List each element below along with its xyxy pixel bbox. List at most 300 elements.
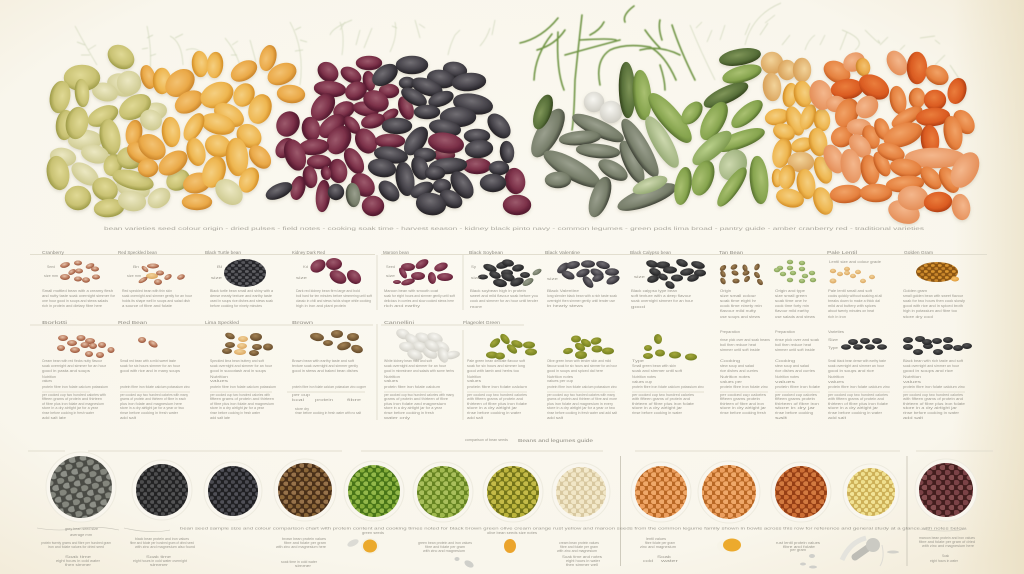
row 1 bean specimens: maroon beans, column 4	[308, 257, 364, 287]
row 2 description text, columns 5-8: Type	[632, 359, 644, 363]
row 1 small side labels: size	[634, 275, 645, 279]
row 1 column headings: Kidney Dark Red	[292, 250, 325, 255]
bottom bowl 5: green beans	[344, 461, 404, 521]
row 2 description text, columns 5-8: thirteen of fibre plus iron folate	[467, 402, 527, 406]
row 1 bean specimens: black cluster, column 3	[224, 259, 266, 287]
row 2 description text, columns 1-4: store in a dry airtight jar for a year	[42, 406, 99, 410]
bottom captions: bowls 9-13: eight hours in water	[930, 559, 959, 563]
bottom captions: bowls 1-4: black bean protein and iron values	[135, 537, 189, 541]
row 1 description text: overnight then simmer gently until tender use	[547, 299, 615, 303]
row 2 description text, columns 9-12: soak overnight and simmer an hour	[828, 364, 885, 368]
bottom captions: bowls 5-8: green bean protein and iron values	[418, 541, 472, 545]
row 2 description text, columns 1-4: good in pasta and soups	[42, 369, 90, 373]
row 2 description text, columns 9-12: Preparation	[775, 330, 795, 334]
row 2 description text, columns 9-12: rinse before cooking fresh	[720, 411, 766, 415]
row 1 column headings: Black Turtle bean	[205, 250, 241, 255]
row 1 small side labels: Bn	[133, 265, 139, 269]
row 2 column headings: Red Bean	[118, 320, 148, 325]
row 1 description text: long slender black bean with a rich taste soak	[547, 294, 617, 298]
row 2 description text, columns 5-8: values	[384, 379, 398, 383]
row 2 description text, columns 1-4: grams of protein and thirteen of fibre in each	[120, 397, 186, 401]
row 1 column headings: Tan Bean	[719, 250, 744, 255]
row 2 bean specimens: olive beans, column 8	[643, 333, 697, 360]
row 1 description text: cooks quickly without soaking at all	[828, 294, 882, 298]
row 2 description text, columns 1-4: Small red bean with a mild sweet taste	[120, 359, 176, 363]
row 2 description text, columns 9-12: Type	[828, 346, 838, 350]
row 1 column headings	[42, 250, 933, 255]
row 2 description text, columns 1-4: per cooked cup two hundred calories with	[42, 393, 106, 397]
row 1 description text: Black Valentine	[547, 289, 579, 293]
row 2 description text, columns 5-8: with fifteen grams of protein and	[632, 397, 690, 401]
bottom bowl 3: black beans	[204, 462, 262, 520]
row 2 description text, columns 1-4: rinse before cooking in fresh water	[210, 411, 261, 415]
row 2 description text, columns 1-4: rinse before cooking in fresh water	[120, 411, 179, 415]
bottom bowl 6: green beans	[413, 462, 473, 522]
bottom captions: bowls 9-13: fibre folate per gram	[645, 541, 675, 545]
top bean display: orange and red beans	[808, 49, 984, 227]
bottom section heading	[465, 438, 594, 443]
decorative sprigs above beans	[75, 3, 960, 85]
row 2 description text, columns 5-8: store in a dry airtight jar	[632, 406, 683, 410]
row 2 description text, columns 1-4: protein fibre iron folate calcium potassium zinc copper	[292, 385, 367, 389]
row 2 description text, columns 5-8: Small green bean with skin	[632, 364, 676, 368]
row 2 description text, columns 9-12: per cooked cup two hundred calories	[903, 393, 963, 397]
row 1 description text: high in iron and plant protein	[296, 304, 346, 308]
row 2 description text, columns 1-4: protein	[315, 398, 333, 402]
icon: egg yolk	[346, 538, 379, 554]
row 1 description text: use salads and stews	[775, 315, 815, 319]
bottom captions: bowls 5-8: eight hours in water	[566, 559, 601, 563]
row 2 description text, columns 5-8: good with lamb and herbs too	[467, 369, 519, 373]
row 2 description text, columns 9-12: values per	[720, 380, 743, 384]
row 2 description text, columns 1-4: soak for six hours simmer for an hour	[120, 364, 181, 368]
row 2 description text, columns 1-4: texture soak overnight and simmer gently	[292, 364, 358, 368]
row 1 description text: Origin and type	[775, 289, 805, 293]
row 2 description text, columns 9-12: Preparation	[720, 330, 740, 334]
row 1 small side labels: Kd	[303, 265, 308, 269]
row 2 description text, columns 5-8: soak overnight and simmer for an hour	[384, 364, 447, 368]
top bean display: grey-green pods	[526, 93, 678, 219]
icon: egg yolk	[504, 539, 516, 553]
row 2 description text, columns 1-4: values	[210, 379, 228, 383]
row 1 description text: soak time eight hr	[720, 299, 757, 303]
row 1 bean specimens: black beans, column 7	[555, 260, 621, 290]
bottom captions: bowls 5-8: with zinc and magnesium	[423, 549, 465, 553]
row 2 description text, columns 9-12: protein fibre iron folate calcium zinc	[903, 385, 965, 389]
row 1 small side labels: size	[471, 276, 480, 280]
row 2 description text, columns 9-12: thirteen of fibre iron	[775, 402, 819, 406]
row 2 description text, columns 9-12: rice dishes and curries	[720, 369, 758, 373]
row 1 bean specimens: pink beans, column 1	[59, 260, 100, 283]
row 2 description text, columns 5-8: flavour soak for six hours and simmer for an hour	[547, 364, 618, 368]
row 2 description text, columns 5-8: protein fibre iron folate calcium	[467, 385, 527, 389]
row 2 description text, columns 9-12: store in a dry airtight jar	[828, 406, 879, 410]
row 2 description text, columns 1-4: protein fibre iron folate calcium potassium	[42, 385, 108, 389]
row 1 description text: more	[470, 305, 482, 309]
bottom captions: bowls 5-8: then simmer well	[566, 563, 598, 567]
row 1 description text: Pale lentil small and soft	[828, 289, 872, 293]
row 2 description text, columns 1-4: good with rice and in many soups	[120, 369, 180, 373]
row 2 description text, columns 1-4: fifteen grams of protein and thirteen	[210, 397, 274, 401]
row 2 description text, columns 9-12: Nutrition notes	[775, 375, 799, 379]
row 1 description text: use soups and stews	[720, 315, 760, 319]
bottom bowl 9: orange lentils	[631, 462, 691, 522]
row 2 description text, columns 5-8: good in soups and spiced dal here	[547, 369, 603, 373]
row 2 bean specimens: white beans, column 5	[395, 327, 461, 364]
row 1 description text: soak time one hr	[775, 299, 808, 303]
bottom captions: bowls 1-4: eight hours in cold water overnight	[133, 559, 187, 563]
row 2 description text, columns 5-8: values cup	[632, 380, 652, 384]
row 2 description text, columns 9-12: rinse pick over and soak beans	[720, 338, 770, 342]
row 2 description text, columns 9-12: rinse pick over and soak	[775, 338, 819, 342]
top bean display: orange beans	[125, 45, 305, 209]
row 2 description text, columns 5-8: thirteen of fibre plus iron folate	[632, 402, 694, 406]
row 2 description text, columns 9-12: add salt	[903, 416, 923, 420]
row 1 description text: good with rice and in spiced broth	[903, 304, 963, 308]
bottom bowl 1: grey beans	[46, 452, 116, 522]
row 2 description text, columns 1-4: Nutrition	[42, 375, 56, 379]
bottom captions: bowls 1-4	[41, 527, 326, 568]
row 1 description text: flavour mild nutty	[720, 309, 756, 313]
row 2 description text, columns 1-4: add salt	[120, 416, 136, 420]
row 2 description text, columns 5-8: Pale green bean delicate flavour soft	[467, 359, 525, 363]
bottom captions: bowls 1-4: fibre and folate per gram	[284, 541, 326, 545]
row 1 column headings: Maroon bean	[383, 250, 409, 255]
row 2 description text, columns 5-8: rinse before cooking in water	[467, 411, 522, 415]
top bean display: yellow-green beans	[45, 41, 192, 217]
row 2 description text, columns 9-12: with fifteen grams of protein and	[828, 397, 884, 401]
bottom captions: bowls 1-4: brown bean protein values	[282, 537, 326, 541]
row 2 description text, columns 1-4: good in stews and baked bean dishes	[292, 369, 358, 373]
bottom captions: bowls 9-13: lentil values	[646, 537, 666, 541]
row 2 description text, columns 5-8	[384, 359, 704, 420]
row 2 description text, columns 1-4: rinse before cooking in fresh water	[42, 411, 95, 415]
row 1 small side labels: size	[296, 276, 307, 280]
row 2 description text, columns 5-8: soak and simmer until soft	[632, 369, 682, 373]
row 2 description text, columns 9-12: per cooked cup calories	[720, 393, 766, 397]
row 1 bean specimens: pink beans, column 2	[138, 264, 186, 285]
row 2 bean specimens: pink beans, column 1	[57, 335, 114, 358]
row 2 description text, columns 5-8: rinse before cooking in water	[632, 411, 683, 415]
row 2 description text, columns 1-4: protein fibre iron folate calcium potassium zinc	[120, 385, 190, 389]
bottom bowl 7: olive beans	[483, 462, 543, 522]
row 2 description text, columns 5-8: good in minestrone and salads with some herbs	[384, 369, 454, 373]
row 2 description text, columns 9-12: soak overnight and simmer an hour	[903, 364, 960, 368]
bottom captions: bowls 9-13: maroon bean protein and iron values	[919, 536, 975, 540]
bottom long caption strip: bean seed sample size and colour comparison chart with protein content and cooking times noted for black brown green olive cream orange rust yellow and maroon seeds from the common legume family shown in bowls across this row for reference and general study at a glance with notes below	[180, 526, 967, 530]
row 1 description text: and nutty taste soak overnight simmer for	[42, 294, 116, 298]
row 2 column headings: Brown	[292, 320, 314, 325]
row 1 description text: Red speckled bean with thin skin	[122, 289, 172, 293]
row 2 description text, columns 1-4: Speckled lima bean buttery and soft	[210, 359, 264, 363]
row 2 description text, columns 1-4: soak overnight and simmer for an hour	[42, 364, 107, 368]
row 1 small side labels: size mm	[127, 274, 141, 278]
row 1 description text: one hour good in soups and stews salads	[42, 299, 108, 303]
row 2 description text, columns 1-4: store in a dry airtight jar for a year or two	[120, 406, 184, 410]
row 2 description text, columns 5-8: White kidney bean mild and soft	[384, 359, 432, 363]
row 2 description text, columns 9-12: stew soup and salad	[775, 364, 809, 368]
row 1 description text: small golden bean with sweet flavour	[903, 294, 964, 298]
top bean display: green pods	[619, 47, 769, 208]
row 2 description text, columns 9-12: Nutrition notes	[720, 375, 750, 379]
row 1 description text: mild and buttery with spices	[828, 304, 876, 308]
bottom section heading: Beans and legumes guide	[518, 438, 594, 443]
row 2 description text, columns 1-4: of fibre plus iron folate and magnesium	[42, 402, 104, 406]
bottom captions: bowls 1-4: fibre and folate per hundred gram of dried seed	[130, 541, 194, 545]
row 2 description text, columns 9-12: Cooking	[775, 359, 795, 363]
row 1 small side labels: Seed	[386, 265, 395, 269]
row 1 description text: boil hard for ten minutes before simmering until soft	[296, 294, 372, 298]
row 1 description text: holds its shape well in soups and salad dish	[122, 299, 190, 303]
row 2 description text, columns 1-4: fifteen grams of protein and thirteen	[42, 397, 102, 401]
row 1 description text: in hearty stews	[547, 304, 583, 308]
row 1 small side labels: size	[547, 277, 558, 281]
bottom captions: bowls 1-4: with zinc and magnesium also found	[135, 545, 195, 549]
row 2 description text, columns 1-4: fibre	[347, 398, 361, 402]
row 1 description text: Maroon bean with smooth coat	[384, 289, 438, 293]
row 2 description text, columns 9-12: boil then reduce heat	[720, 343, 756, 347]
row 2 description text, columns 1-4: rinse before cooking in fresh water with no salt	[295, 411, 361, 415]
bottom captions: bowls 1-4: with zinc and magnesium here	[276, 545, 326, 549]
row 1 description text: flavour mild earthy	[775, 309, 809, 313]
row 1 description text: cook time forty min	[775, 304, 809, 308]
row 1 description text: rich and earthy	[384, 304, 420, 308]
bottom bowl 11: rust lentils	[771, 462, 831, 522]
row 2 description text, columns 9-12: fifteen grams protein	[775, 397, 815, 401]
row 1 bean specimens: tan lentils, column 11	[830, 267, 875, 284]
row 1 column headings: Black Calypso bean	[630, 250, 671, 255]
row 2 description text, columns 9-12: values	[775, 380, 795, 384]
row 1 description text: high in potassium and fibre too	[903, 309, 957, 313]
caption line under top beans: bean varieties seed colour origin - dried pulses - field notes - cooking soak time - harvest season - kidney black pinto navy - common legumes - green pods lima broad - pantry guide - amber cranberry red - traditional varieties	[104, 226, 925, 231]
row 2 description text, columns 5-8: per cooked cup two hundred calories	[467, 393, 527, 397]
row 2 description text, columns 5-8: Olive green bean with tender skin and mild	[547, 359, 611, 363]
icon: egg yolk	[717, 538, 741, 553]
row 2 description text, columns 9-12: good in soups and rice	[903, 369, 953, 373]
row 2 description text, columns 5-8: Nutrition	[384, 375, 400, 379]
row 1 description text: Origin	[720, 289, 731, 293]
row 2 description text, columns 9-12: per cooked cup two hundred calories	[828, 393, 888, 397]
row 1 description text	[42, 289, 965, 319]
green leaves and stems	[520, 6, 695, 130]
row 2 description text, columns 9-12: rinse before cooking	[775, 411, 813, 415]
row 1 small side labels: Sy	[471, 265, 476, 269]
section rules and dividers	[28, 254, 993, 566]
row 2 description text, columns 5-8: values per cup	[547, 379, 573, 383]
bottom bowl 13: maroon beans	[915, 459, 977, 521]
bottom captions: bowls 9-13: Soak	[942, 554, 949, 558]
row 1 bean specimens: golden cluster, column 12	[916, 262, 959, 282]
row 1 description text: soak for eight hours and simmer gently until soft	[384, 294, 455, 298]
row 1 bean specimens: black soybeans, column 6	[478, 259, 543, 288]
row 2 description text, columns 5-8: add salt	[547, 416, 563, 420]
row 2 description text, columns 5-8: store in a dry airtight jar	[467, 406, 518, 410]
row 1 description text: delicious in curries and slow cooked stews here	[384, 299, 454, 303]
row 1 description text: cook time ninety min	[720, 304, 762, 308]
icon: grey spoon shape	[842, 538, 899, 566]
bottom captions: bowls 1-4: eight hours in cold water	[56, 559, 101, 563]
bottom captions: bowls 9-13: per gram	[790, 548, 806, 552]
bottom captions: bowls 1-4: iron and folate values for dried seed	[48, 545, 104, 549]
row 2 description text, columns 9-12	[720, 330, 965, 420]
row 2 description text, columns 5-8: protein fibre iron folate calcium potassium zinc	[632, 385, 704, 389]
row 2 description text, columns 9-12: protein fibre iron folate zinc	[720, 385, 768, 389]
row 2 description text, columns 9-12: salt	[775, 416, 787, 420]
row 2 description text, columns 5-8: protein fibre iron folate calcium	[384, 385, 440, 389]
bottom captions: bowls 5-8: Soak time and notes	[562, 555, 602, 559]
bottom captions: bowls 9-13: fibre and folate per gram of dried	[919, 540, 975, 544]
row 2 description text, columns 5-8: grams of protein and thirteen of fibre and more	[547, 397, 617, 401]
row 2 description text, columns 9-12: with fifteen grams of protein and	[903, 397, 963, 401]
row 2 description text, columns 9-12: Black bean with rich taste and soft	[903, 359, 963, 363]
bottom captions: bowls 1-4: soak time in cold water	[281, 560, 318, 564]
row 2 description text, columns 1-4: add salt late	[42, 416, 66, 420]
row 2 description text, columns 9-12: simmer until soft inside	[775, 348, 815, 352]
row 2 description text, columns 1-4: of fibre plus iron folate and magnesium	[210, 402, 274, 406]
row 1 description text: rich in iron	[828, 315, 846, 319]
row 1 description text: dense meaty texture and earthy taste	[210, 294, 272, 298]
bottom captions: bowls 1-4: simmer	[295, 564, 312, 568]
row 2 bean specimens: brown beans, column 4	[309, 330, 364, 354]
row 2 description text, columns 1-4: add salt late	[210, 416, 230, 420]
row 2 description text, columns 5-8: rinse before cooking in fresh water and add salt	[547, 411, 617, 415]
row 2 description text, columns 5-8: values	[467, 379, 481, 383]
row 2 description text, columns 5-8: soak for six hours and simmer long	[467, 364, 525, 368]
row 2 description text, columns 5-8: plus iron folate and magnesium	[384, 402, 446, 406]
row 2 description text, columns 9-12: good in soups and rice	[828, 369, 874, 373]
row 2 description text, columns 1-4: good in succotash and in soups	[210, 369, 266, 373]
row 1 description text: classic in chili and stews holds shape while cooking	[296, 299, 371, 303]
row 2 description text, columns 9-12: store in dry airtight jar	[720, 406, 767, 410]
row 2 bean specimens: two red beans, column 2	[138, 337, 159, 349]
bottom bowl 12: yellow lentils	[843, 464, 899, 520]
row 2 description text, columns 5-8: store in a dry airtight jar for a year or two	[547, 406, 615, 410]
row 1 description text: good	[631, 305, 645, 309]
row 1 bean specimens: dark maroon beans, column 5	[393, 257, 453, 287]
row 2 description text, columns 9-12: add salt	[828, 416, 846, 420]
row 2 column headings: Borlotti	[42, 320, 67, 325]
row 1 description text: before cooking for ninety minutes	[210, 304, 262, 308]
bottom captions: bowls 9-13: with zinc and magnesium here	[922, 544, 974, 548]
bottom captions: bowls 5-8: with zinc and magnesium	[557, 549, 597, 553]
row 2 description text, columns 1-4	[42, 359, 367, 420]
row 2 description text, columns 5-8: protein fibre iron folate calcium potassium zinc	[547, 385, 617, 389]
row 2 description text, columns 5-8: per cooked cup two hundred calories	[632, 393, 694, 397]
bottom captions: bowls 9-13: Soak	[657, 555, 671, 559]
row 2 description text, columns 9-12: Varieties	[828, 330, 844, 334]
row 1 description text: rich in protein and dietary fibre here	[42, 304, 102, 308]
row 2 description text, columns 9-12: Nutrition	[903, 375, 921, 379]
bottom captions: bowls 9-13	[640, 536, 975, 563]
row 1 description text: Small mottled bean with a creamy flesh	[42, 289, 113, 293]
row 2 description text, columns 9-12: rinse before cooking in water	[828, 411, 883, 415]
row 2 description text, columns 1-4: soak overnight and simmer for an hour	[210, 364, 273, 368]
row 1 description text: Dark red kidney bean firm large and bold	[296, 289, 360, 293]
row 1 description text: size small green	[775, 294, 807, 298]
bottom bowl 2: black beans	[132, 460, 192, 520]
bottom bowl 10: orange lentils	[698, 461, 760, 523]
row 1 description text: size small colour	[720, 294, 757, 298]
row 2 description text, columns 9-12: store in a dry airtight jar	[903, 406, 958, 410]
row 2 description text, columns 5-8: plus iron folate and magnesium in every	[547, 402, 613, 406]
row 2 description text, columns 1-4: per cooked cup two hundred calories with	[210, 393, 270, 397]
row 2 column headings	[42, 320, 500, 325]
row 1 small side labels: size	[386, 274, 395, 278]
row 1 description text: Golden gram	[903, 289, 927, 293]
row 2 column headings: Lima Speckled	[205, 320, 239, 325]
row 1 description text: Black soybean high in protein	[470, 289, 526, 293]
bottom captions: bowls 9-13: water	[661, 559, 679, 563]
row 2 bean specimens: tan-brown beans, column 3	[222, 331, 273, 356]
row 2 description text, columns 5-8: store in a dry airtight jar for a year	[384, 406, 443, 410]
bottom captions: bowls 1-4: average mm	[70, 533, 92, 537]
row 2 bean specimens: black beans, column 12	[903, 336, 972, 355]
bottom captions: bowls 9-13: rust lentil protein values	[776, 541, 820, 545]
bottom bowl 4: brown beans	[274, 459, 336, 521]
bottom captions: bowls 9-13: fibre and folate	[783, 545, 815, 549]
row 2 description text, columns 9-12: values	[828, 380, 844, 384]
bottom captions: bowls 1-4: protein twenty grams and fibre per hundred gram	[41, 541, 111, 545]
row 2 description text, columns 1-4: plus iron folate and magnesium here	[120, 402, 182, 406]
row 1 bean specimens: black beans, column 8	[645, 258, 706, 291]
row 1 description text: sweet and mild flavour soak before you	[470, 294, 538, 298]
row 2 bean specimens: olive beans, column 6	[486, 332, 537, 360]
row 1 description text: a source of fibre and folate	[122, 304, 172, 308]
row 2 description text, columns 5-8: Nutrition notes	[632, 375, 656, 379]
row 1 small side labels: Bl	[217, 265, 222, 269]
row 2 description text, columns 9-12: Size	[828, 338, 838, 342]
row 2 description text, columns 5-8: per cooked cup two hundred calories with many	[547, 393, 615, 397]
row 1 column headings: Golden Gram	[904, 250, 933, 255]
row 2 description text, columns 5-8: per cooked cup two hundred calories with many	[384, 393, 454, 397]
bottom section heading: comparison of bean seeds	[465, 438, 508, 442]
row 1 small side labels: size	[211, 276, 222, 280]
row 2 description text, columns 9-12: thirteen of fibre plus iron folate	[828, 402, 888, 406]
row 1 column headings: Cranberry	[42, 250, 65, 255]
top bean display: amber beans	[762, 53, 835, 216]
row 2 description text, columns 1-4: store in a dry airtight jar for a year	[210, 406, 265, 410]
row 2 description text, columns 5-8: Nutrition notes	[547, 375, 573, 379]
row 2 description text, columns 9-12: rinse before cooking in water	[903, 411, 960, 415]
bottom captions: bowls 1-4: then simmer	[65, 563, 92, 567]
row 1 description text: about twenty minutes on heat	[828, 309, 874, 313]
bottom captions: bowls 5-8: olive bean seeds size notes	[487, 531, 537, 535]
row 1 small side labels: size mm	[44, 274, 58, 278]
row 2 description text, columns 1-4: store dry	[295, 407, 309, 411]
row 2 description text, columns 5-8: water only	[384, 416, 410, 420]
row 2 description text, columns 9-12: per cooked cup calories	[775, 393, 817, 397]
row 1 column headings: Pale Lentil	[827, 250, 857, 255]
bottom captions: bowls 1-4: Soak time	[65, 555, 91, 559]
row 2 description text, columns 5-8: add salt	[467, 416, 483, 420]
row 2 description text, columns 9-12: thirteen of fibre plus iron folate	[903, 402, 965, 406]
row 2 description text, columns 9-12: thirteen of fibre and iron	[720, 402, 764, 406]
icon: small grey pebbles	[800, 554, 817, 568]
bottom captions: bowls 5-8: fibre and folate per gram	[560, 545, 598, 549]
row 1 description text: soft texture with a deep flavour	[631, 294, 692, 298]
row 2 description text, columns 1-4: per cooked cup two hundred calories with many	[120, 393, 188, 397]
top bean display: maroon kidney beans	[273, 57, 530, 215]
bottom captions: bowls 5-8: cream bean protein values	[559, 541, 599, 545]
row 2 description text, columns 1-4: Cream bean with red flecks nutty flavour	[42, 359, 103, 363]
row 1 description text: cook and simmer for an hour until tender	[470, 299, 539, 303]
row 2 column headings: Flageolet Green	[463, 320, 500, 325]
row 2 description text, columns 9-12: store in dry jar	[775, 406, 816, 410]
row 2 description text, columns 9-12: boil then reduce heat	[775, 343, 811, 347]
row 2 description text, columns 9-12: Nutrition	[828, 375, 844, 379]
row 2 description text, columns 9-12: values	[903, 380, 921, 384]
row 2 description text, columns 1-4: per cup	[292, 393, 310, 397]
